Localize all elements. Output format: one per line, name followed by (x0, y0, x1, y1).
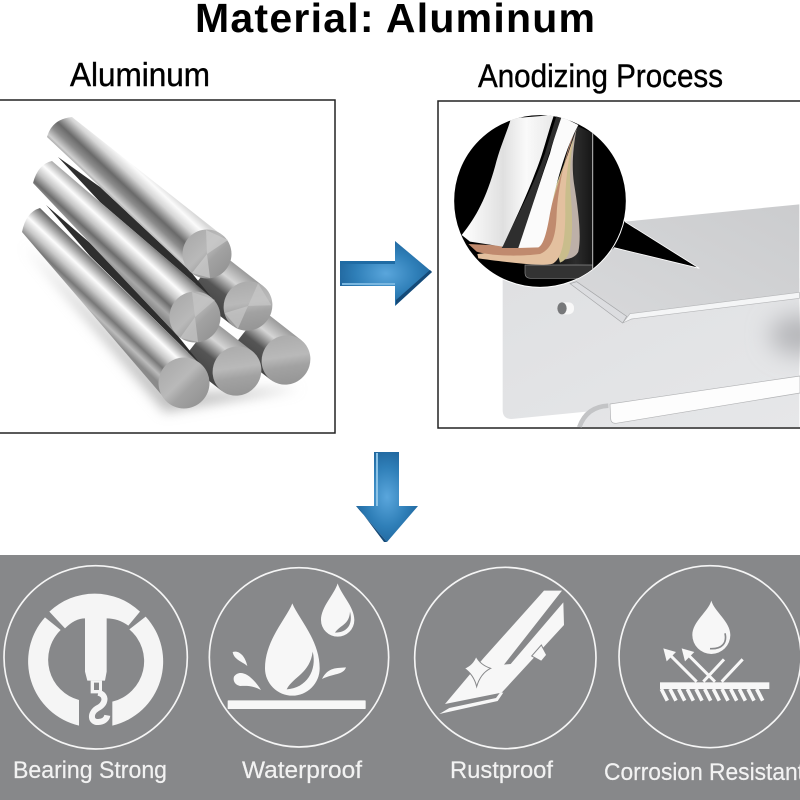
rods shadow (25, 245, 300, 412)
anodized layers (565, 128, 580, 260)
feature: rustproof (415, 567, 596, 784)
polished layers (502, 115, 562, 248)
arrow: right (340, 241, 432, 306)
feature: waterproof (209, 568, 389, 784)
rod: top long (47, 117, 232, 278)
heading: anodizing process: Anodizing Process (478, 58, 723, 94)
mounting screw (557, 302, 574, 314)
icon: drop bouncing off surface (619, 566, 800, 748)
arrow: down (356, 452, 418, 542)
magnified circle (454, 115, 626, 287)
rod: lower middle (182, 321, 271, 405)
rod: middle right (189, 252, 282, 340)
holder cut-out arc (579, 406, 608, 427)
holder white strip (610, 376, 800, 423)
icon: water drops (209, 568, 389, 747)
aluminum back plate (503, 278, 799, 427)
rod: lower right (231, 310, 320, 394)
dark inner panel (550, 125, 593, 270)
label: waterproof: Waterproof (242, 757, 362, 784)
icon: blade (415, 567, 596, 749)
shelf top surface (570, 204, 799, 323)
feature: bearing strong (4, 566, 187, 784)
heading: aluminum: Aluminum (70, 56, 210, 93)
panel: aluminum rods (0, 100, 335, 433)
dark gaps between rods (46, 157, 212, 366)
icon: crane hook (4, 566, 187, 749)
label: bearing strong: Bearing Strong (13, 757, 167, 784)
rod: middle long (33, 161, 220, 342)
rod: bottom long (22, 208, 210, 408)
shelf front edge (623, 292, 799, 323)
callout tail (590, 215, 699, 272)
plate soft shadow (770, 315, 800, 355)
panel: anodizing process (438, 101, 800, 428)
label: rustproof: Rustproof (450, 757, 553, 784)
feature: corrosion resistant (604, 566, 800, 786)
panel: features band (0, 555, 800, 800)
